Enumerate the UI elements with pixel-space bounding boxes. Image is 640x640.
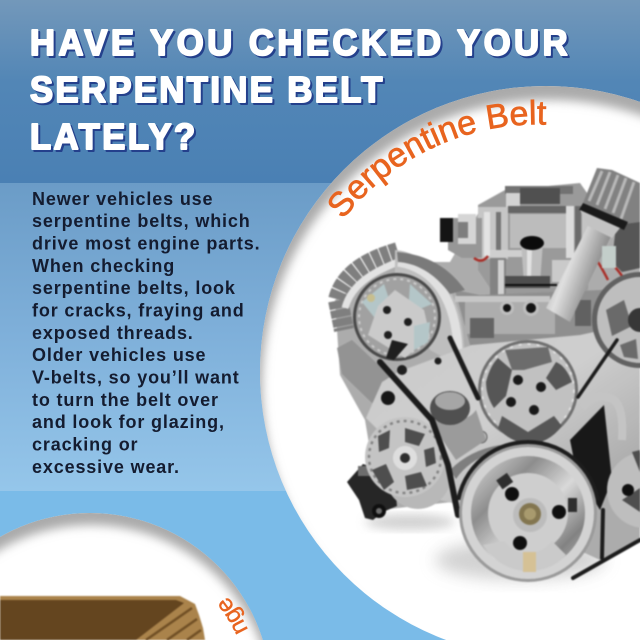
right upper pulley: [592, 272, 640, 368]
right bracket: [612, 215, 640, 272]
body text: Older vehicles use: [32, 345, 206, 365]
bolt boss: [430, 391, 470, 425]
title face: SERPENTINE BELT: [30, 70, 383, 110]
engine drop shadow: [435, 540, 605, 580]
title face: [30, 23, 568, 157]
engine block manifold: [455, 285, 640, 345]
right lower pulley: [607, 450, 640, 528]
title shadow: SERPENTINE BELT: [32, 72, 385, 112]
air filter element: [579, 168, 640, 238]
body text: excessive wear.: [32, 457, 180, 477]
title shadow: LATELY?: [32, 119, 197, 159]
body text: [32, 189, 260, 477]
title face: LATELY?: [30, 117, 195, 157]
ribbed hose: [338, 252, 398, 330]
right dark cavity: [570, 405, 612, 510]
title face: HAVE YOU CHECKED YOUR: [30, 23, 568, 63]
water pump pulley: [478, 340, 578, 444]
body text: serpentine belts, which: [32, 211, 251, 231]
crank belt arc: [456, 440, 575, 501]
engine illustration: [335, 168, 640, 586]
body text: drive most engine parts.: [32, 234, 260, 254]
body text: exposed threads.: [32, 323, 194, 343]
body text: serpentine belts, look: [32, 278, 236, 298]
body text: to turn the belt over: [32, 390, 219, 410]
label: Serpentine Belt: Serpentine Belt: [328, 99, 546, 216]
left-top pulley: [353, 273, 441, 361]
grey side block: [337, 340, 400, 403]
title: [30, 23, 570, 159]
title shadow: [32, 25, 570, 159]
body text: cracking or: [32, 434, 138, 454]
label: partial word: nge: [219, 598, 248, 635]
serpentine belt strands: [380, 338, 640, 578]
body text: Newer vehicles use: [32, 189, 213, 209]
thermostat housing: [347, 464, 397, 520]
body text: and look for glazing,: [32, 412, 225, 432]
red hoses: [474, 256, 622, 280]
title shadow: HAVE YOU CHECKED YOUR: [32, 25, 570, 65]
air filter tube: [546, 222, 612, 322]
body text: V-belts, so you’ll want: [32, 368, 240, 388]
gasket stack: [0, 596, 205, 640]
body text: for cracks, fraying and: [32, 300, 245, 320]
front plate: [366, 322, 640, 505]
background: top header band: [0, 0, 640, 183]
panel: bottom-left gasket circle: [0, 513, 263, 640]
panel: serpentine belt circle: [260, 86, 640, 640]
crank pulley: [459, 444, 597, 582]
carburetor: [440, 183, 592, 300]
background: text panel band: [0, 183, 640, 491]
background: lower sky-blue band: [0, 491, 640, 640]
engine base silhouette: [335, 210, 640, 560]
body text: When checking: [32, 256, 175, 276]
upper left housing: [395, 250, 466, 370]
power steering pulley: [365, 417, 452, 509]
